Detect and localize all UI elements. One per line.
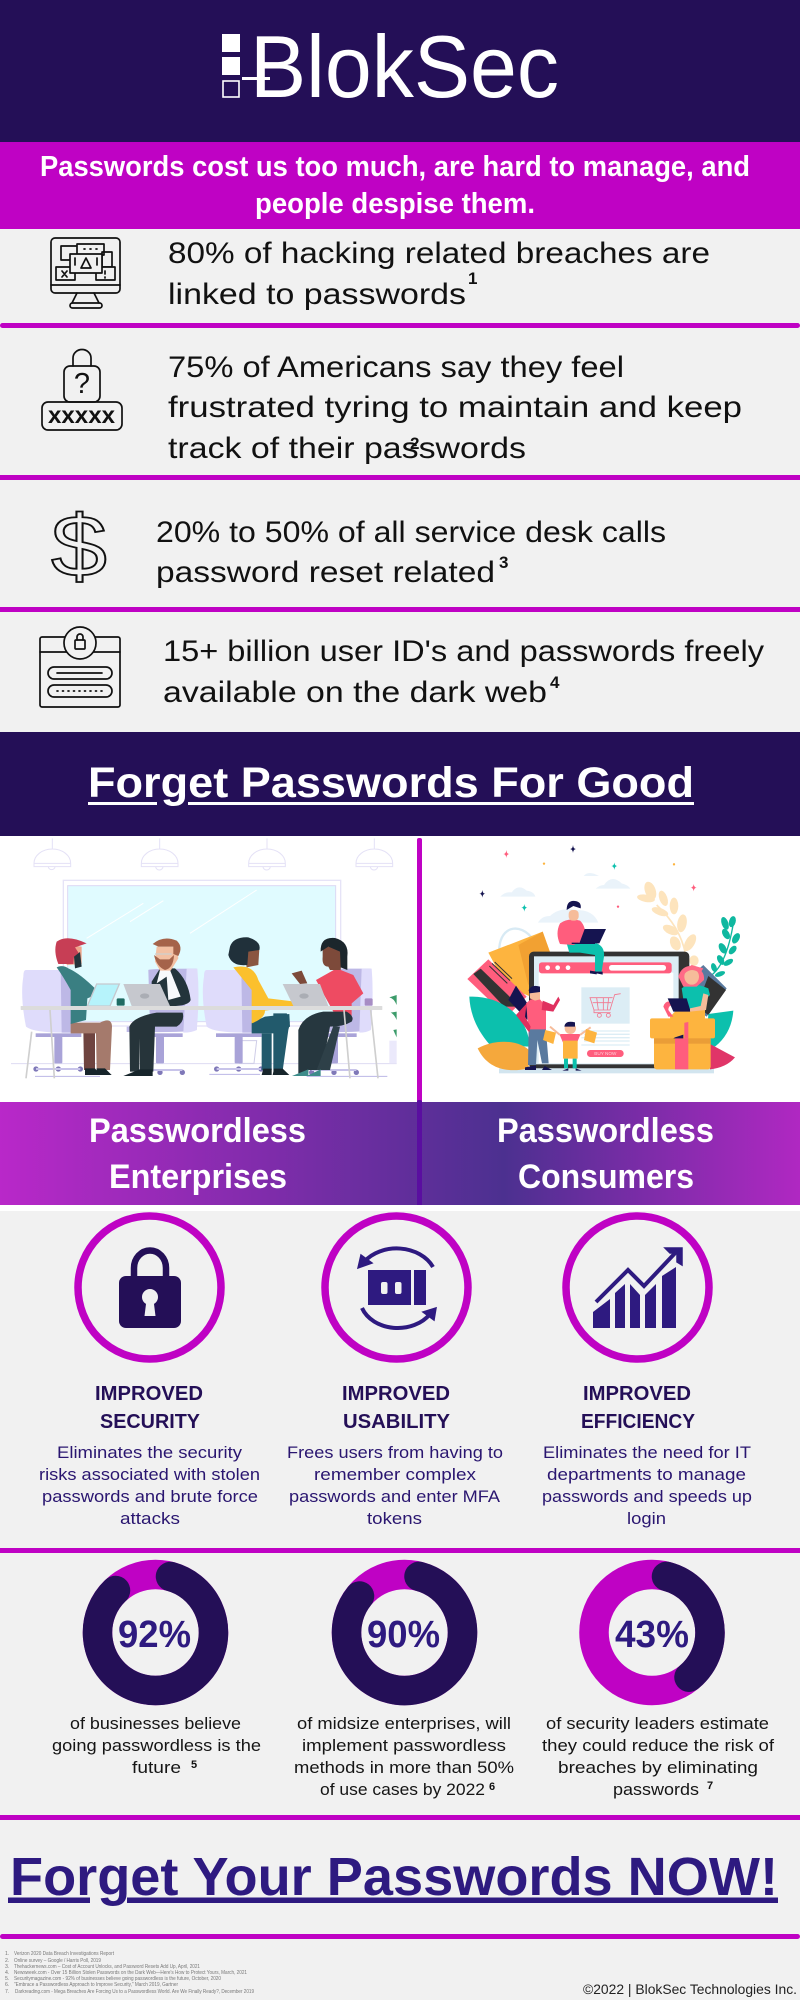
woman with laptop on gift <box>663 965 710 1038</box>
icon: dollar sign: $ <box>51 498 107 595</box>
references list: Securitymagazine.com - 92% of businesses believe going passwordless is the future, October, 2020 <box>14 1976 221 1982</box>
caption: of midsize enterprises, will <box>297 1714 511 1733</box>
section heading banner: Forget Passwords For Good <box>88 759 694 807</box>
child with shopping bags <box>543 1022 597 1071</box>
icon: lock and password <box>42 350 122 430</box>
description: attacks <box>120 1509 180 1528</box>
person: red hair with phone <box>55 938 112 1075</box>
icon: login panel <box>40 627 120 707</box>
heading: IMPROVED <box>583 1383 691 1405</box>
references list: 5. <box>5 1976 9 1982</box>
description: passwords and brute force <box>42 1487 258 1506</box>
text: 15 billion: 15+ billion user ID's and passwords freely <box>163 635 764 668</box>
description: Eliminates the need for IT <box>543 1443 751 1462</box>
stat row: dark web credentials: 4 <box>550 673 560 692</box>
description: Frees users from having to <box>287 1443 503 1462</box>
references list <box>5 1951 254 1995</box>
heading: IMPROVED <box>342 1383 450 1405</box>
stat row: frustrated Americans: track of their passwords <box>168 432 526 465</box>
logo mark <box>222 34 270 97</box>
icon: sync arrows and device <box>325 1216 468 1359</box>
vertical divider <box>417 838 422 1103</box>
references list: Online survey – Google / Harris Poll, 2019 <box>14 1958 101 1964</box>
man with laptop on screen <box>557 901 606 975</box>
caption: of businesses believe <box>70 1714 241 1733</box>
donut chart <box>346 1574 463 1691</box>
icon: monitor with alerts <box>51 238 120 308</box>
gradient band with audience labels <box>0 1100 800 1207</box>
subtitle banner: people despise them. <box>255 188 535 220</box>
description: tokens <box>367 1509 422 1528</box>
divider <box>0 1548 800 1553</box>
caption: 5 <box>191 1759 197 1771</box>
clouds <box>500 873 630 923</box>
illustration: enterprise team meeting <box>11 838 397 1078</box>
references list: "Embrace a Passwordless Approach to Improve Security," March 2019, Gartner <box>14 1982 178 1988</box>
leaves, left <box>469 997 531 1070</box>
white illustration background <box>0 836 800 1102</box>
text: 20 to 50 percent: 20% to 50% of all service desk calls <box>156 516 666 549</box>
label: consumers <box>497 1112 714 1196</box>
caption: methods in more than 50% <box>294 1758 514 1777</box>
stat row: dark web credentials: available on the dark web <box>163 676 547 709</box>
caption <box>542 1714 774 1799</box>
description: departments to manage <box>547 1465 746 1484</box>
label: enterprises: Enterprises <box>109 1158 287 1196</box>
caption: future <box>132 1758 181 1777</box>
product panel with cart <box>581 987 630 1024</box>
description: passwords and enter MFA <box>289 1487 501 1506</box>
benefit: improved efficiency: EFFICIENCY <box>581 1411 696 1433</box>
text: 80 percent: 80% of hacking related breaches are <box>168 237 710 270</box>
description: risks associated with stolen <box>39 1465 260 1484</box>
divider <box>0 607 800 612</box>
stat row: service desk calls: 3 <box>499 553 508 572</box>
donut chart <box>594 1574 710 1690</box>
divider <box>0 1934 800 1939</box>
buy now button <box>587 1050 624 1057</box>
person: curly hair, yellow sweater <box>228 937 297 1075</box>
icon: lock and password: ? <box>74 368 90 400</box>
man in pink hoodie <box>516 986 560 1070</box>
heading: IMPROVED <box>95 1383 203 1405</box>
text: 75 percent: 75% of Americans say they feel <box>168 351 624 384</box>
stat row: hacking breaches <box>51 237 710 311</box>
stat row: frustrated Americans: 2 <box>410 434 419 453</box>
call to action: Forget Your Passwords NOW! <box>10 1847 778 1907</box>
donut chart <box>97 1574 214 1691</box>
label: enterprises: Passwordless <box>89 1112 306 1150</box>
stat: 90 percent <box>294 1574 514 1799</box>
caption: 6 <box>489 1781 495 1793</box>
references list: 2. <box>5 1958 9 1964</box>
gift box <box>650 1018 715 1069</box>
beige plant <box>636 880 699 966</box>
donut chart: 90% <box>367 1614 440 1656</box>
label: consumers: Passwordless <box>497 1112 714 1150</box>
window <box>63 880 341 1026</box>
references list: 1. <box>5 1951 9 1957</box>
donut chart: 92% <box>118 1614 191 1656</box>
floor <box>11 1064 397 1076</box>
caption: 7 <box>707 1780 713 1792</box>
icon: padlock <box>78 1216 221 1359</box>
caption: going passwordless is the <box>52 1736 261 1755</box>
header with logo <box>0 0 800 142</box>
leaves, right <box>707 1011 735 1069</box>
description: Eliminates the security <box>57 1443 243 1462</box>
caption: they could reduce the risk of <box>542 1736 774 1755</box>
caption: breaches by eliminating <box>558 1758 758 1777</box>
caption: implement passwordless <box>302 1736 506 1755</box>
references list: Thehackernews.com – Cost of Account Unlocks, and Password Resets Add Up, April, 2021 <box>14 1964 200 1970</box>
sparkles <box>479 845 697 912</box>
green sprig <box>710 915 742 978</box>
stat: 92 percent <box>52 1574 261 1777</box>
table <box>21 1006 382 1078</box>
references list: Verizon 2020 Data Breach Investigations Report <box>14 1951 115 1957</box>
credit card, left <box>467 959 527 1020</box>
divider <box>0 323 800 328</box>
laptop with shop page <box>529 952 689 1068</box>
icon: growth chart <box>566 1216 709 1359</box>
section heading banner <box>0 732 800 836</box>
references list: 6. <box>5 1982 9 1988</box>
label: enterprises <box>89 1112 306 1196</box>
caption: passwords <box>613 1780 699 1799</box>
references list: 3. <box>5 1964 9 1970</box>
person: bearded man with laptop <box>87 938 191 1076</box>
references list: 4. <box>5 1970 9 1976</box>
stat: 43 percent <box>542 1574 774 1799</box>
buy now button: BUY NOW <box>594 1051 617 1056</box>
caption: of security leaders estimate <box>546 1714 769 1733</box>
caption <box>294 1714 514 1799</box>
description: login <box>627 1509 666 1528</box>
ceiling lamps <box>34 838 393 870</box>
subtitle banner: Passwords cost us too much, are hard to manage, and <box>40 151 750 183</box>
subtitle banner <box>0 142 800 229</box>
benefit: improved efficiency <box>542 1216 752 1528</box>
logo wordmark: BlokSec <box>250 17 559 116</box>
description <box>542 1443 752 1528</box>
description: remember complex <box>314 1465 477 1484</box>
shopping bag <box>488 929 551 997</box>
stat row: hacking breaches: 1 <box>468 269 477 288</box>
illustration: online shopping consumers <box>467 845 742 1073</box>
donut chart: 43% <box>615 1614 689 1656</box>
caption <box>52 1714 261 1777</box>
stat row: dark web credentials <box>40 627 764 709</box>
copyright: ©2022 | BlokSec Technologies Inc. <box>583 1981 797 1997</box>
stat row: service desk calls <box>51 498 666 595</box>
label: consumers: Consumers <box>518 1158 694 1196</box>
plant <box>389 995 397 1063</box>
benefit: improved security: SECURITY <box>100 1411 201 1433</box>
references list: 7. <box>5 1989 9 1995</box>
stat row: hacking breaches: linked to passwords <box>168 278 466 311</box>
description <box>39 1443 260 1528</box>
benefit: improved usability <box>287 1216 503 1528</box>
credit card, right <box>687 965 727 1017</box>
person: woman in red shirt <box>283 938 373 1076</box>
stat row: frustrated Americans: frustrated tyring to maintain and keep <box>168 391 742 424</box>
divider <box>0 475 800 480</box>
references list: Newsweek.com - Over 15 Billion Stolen Passwords on the Dark Web—Here's How to Protect Yours, March, 2021 <box>14 1970 247 1976</box>
description <box>287 1443 503 1528</box>
stat row: frustrated Americans <box>42 350 742 465</box>
waste basket <box>237 1041 257 1063</box>
icon: lock and password: xxxxx <box>48 402 115 428</box>
references list: Darkreading.com - Mega Breaches Are Forcing Us to a Passwordless World. Are We Finally Ready?, December 2019 <box>15 1989 254 1995</box>
divider <box>0 1815 800 1820</box>
benefit: improved security <box>39 1216 260 1528</box>
chairs <box>22 969 373 1075</box>
caption: of use cases by 2022 <box>320 1780 485 1799</box>
benefit: improved usability: USABILITY <box>343 1411 451 1433</box>
description: passwords and speeds up <box>542 1487 752 1506</box>
stat row: service desk calls: password reset related <box>156 556 495 589</box>
